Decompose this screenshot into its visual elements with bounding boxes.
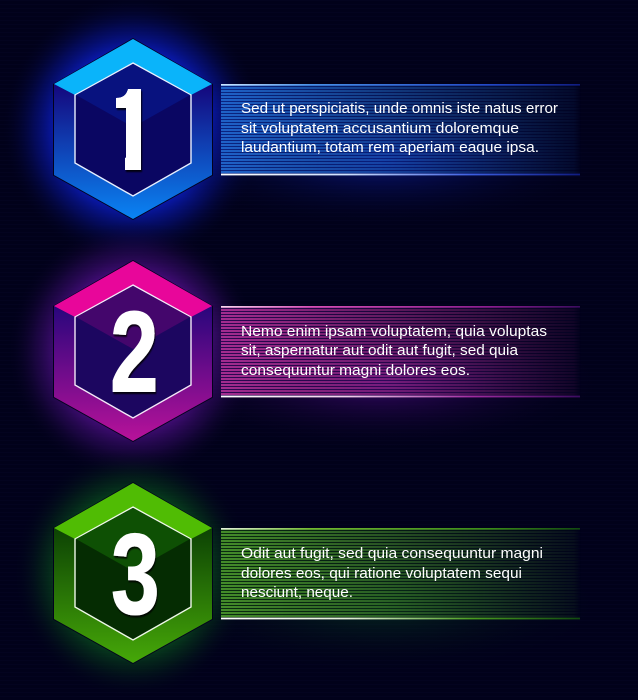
number 1: 1 bbox=[100, 67, 164, 195]
glow: step 3 bbox=[13, 448, 610, 698]
description 2: Nemo enim ipsam voluptatem, quia voluptas bbox=[241, 323, 547, 340]
text bar 3 bbox=[221, 528, 581, 619]
panel: step 2 bbox=[20, 238, 580, 466]
glow: step 1 bbox=[1, 0, 610, 264]
description 3: dolores eos, qui ratione voluptatem sequi bbox=[241, 565, 522, 582]
hexagon badge 3 bbox=[53, 482, 213, 664]
glow: step 2 bbox=[7, 221, 610, 481]
description 3: Odit aut fugit, sed quia consequuntur magni bbox=[241, 545, 543, 562]
description 2: sit, aspernatur aut odit aut fugit, sed quia bbox=[241, 342, 519, 359]
description 3: nesciunt, neque. bbox=[241, 584, 353, 601]
description 1: sit voluptatem accusantium doloremque bbox=[241, 120, 519, 137]
text bar 2 bbox=[221, 306, 581, 397]
description 2: consequuntur magni dolores eos. bbox=[241, 362, 470, 379]
hexagon badge 1 bbox=[53, 38, 213, 220]
hexagon badge 2 bbox=[53, 260, 213, 442]
description 1: laudantium, totam rem aperiam eaque ipsa. bbox=[241, 139, 539, 156]
panel: step 3 bbox=[28, 465, 580, 682]
number 2: 2 bbox=[110, 288, 159, 416]
number 3: 3 bbox=[111, 510, 160, 638]
description 1: Sed ut perspiciatis, unde omnis iste natus error bbox=[241, 100, 558, 117]
number 1 bbox=[116, 89, 143, 173]
panel: step 1 bbox=[13, 6, 580, 248]
text bar 1 bbox=[221, 84, 581, 175]
